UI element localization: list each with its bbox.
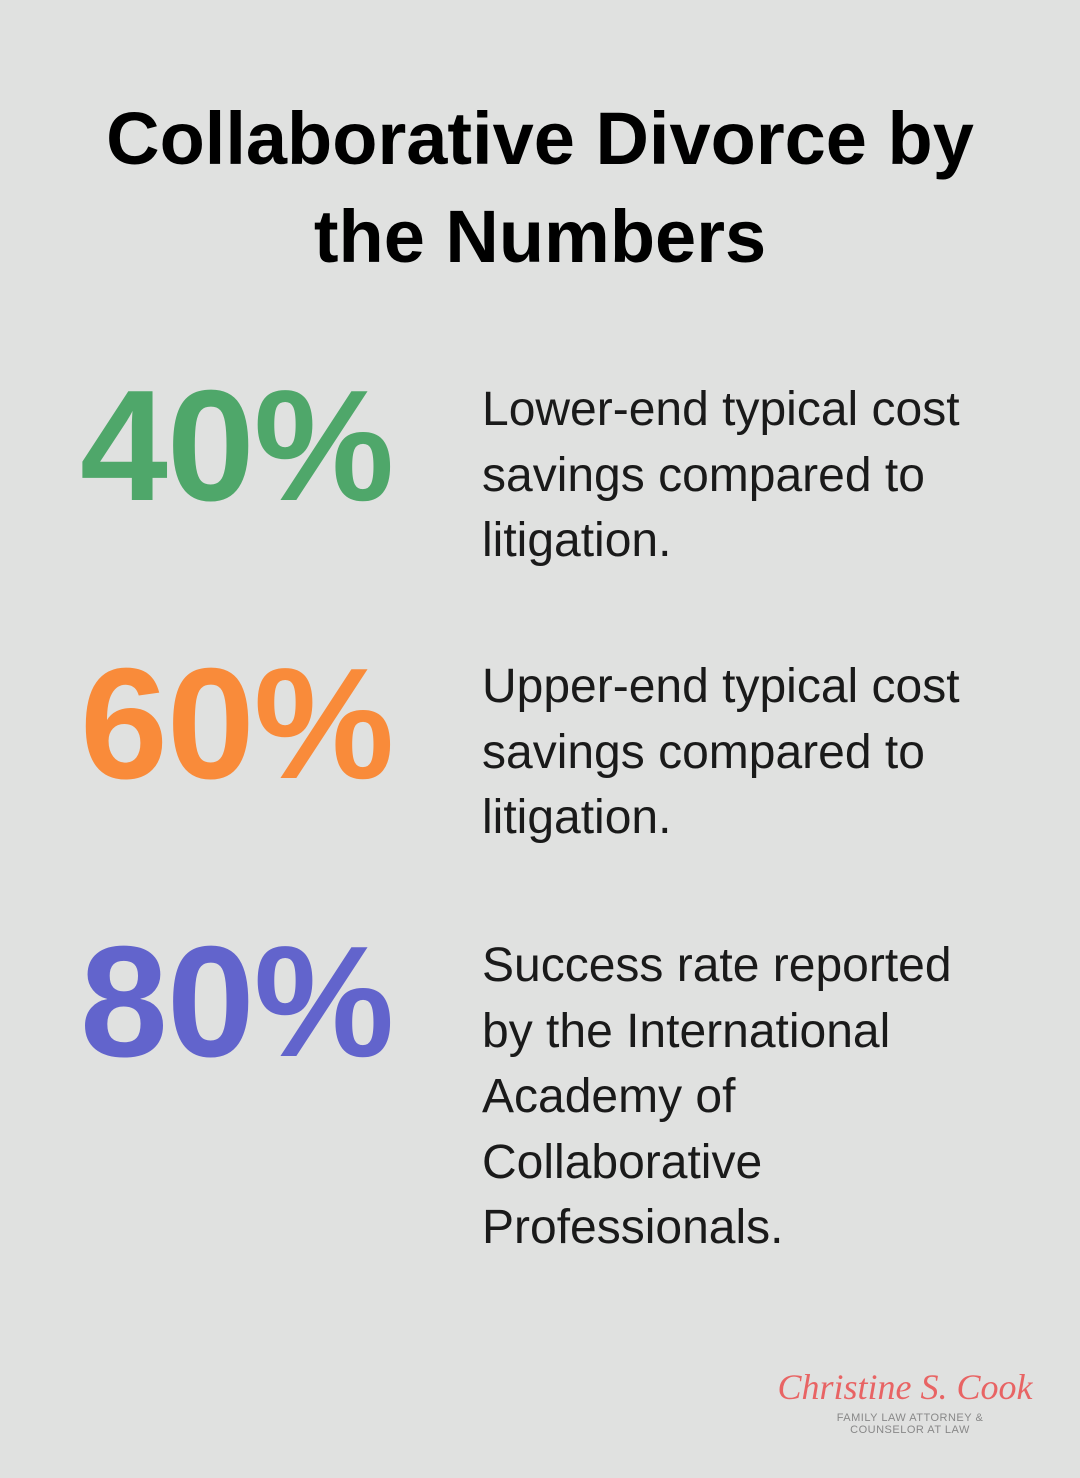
- text: 40% description: savings compared to: [482, 448, 925, 502]
- text: 80% description: Collaborative: [482, 1136, 762, 1188]
- text: 40% description: litigation.: [482, 514, 671, 567]
- logo: FAMILY LAW ATTORNEY &: [837, 1412, 983, 1424]
- title: the Numbers: [314, 195, 766, 278]
- text: 60% description: Upper-end typical cost: [482, 660, 960, 713]
- text: 80% description: by the International: [482, 1004, 890, 1058]
- text: 40% description: [482, 383, 960, 567]
- text: 80% description: Success rate reported: [482, 939, 952, 992]
- text: 60% description: [482, 660, 960, 844]
- text: 60% description: litigation.: [482, 791, 671, 844]
- stat: 60%: 60%: [80, 636, 393, 812]
- stat: 40%: 40%: [80, 358, 393, 534]
- logo: [777, 1367, 1033, 1436]
- text: 80% description: Academy of: [482, 1070, 735, 1123]
- text: 60% description: savings compared to: [482, 726, 925, 778]
- text: 80% description: [482, 939, 952, 1254]
- text: 40% description: Lower-end typical cost: [482, 383, 960, 436]
- logo: Christine S. Cook: [777, 1367, 1032, 1407]
- title: Collaborative Divorce by: [106, 97, 974, 180]
- title: [106, 97, 974, 278]
- text: 80% description: Professionals.: [482, 1201, 783, 1254]
- stat: 80%: 80%: [80, 914, 393, 1090]
- logo: COUNSELOR AT LAW: [850, 1424, 970, 1436]
